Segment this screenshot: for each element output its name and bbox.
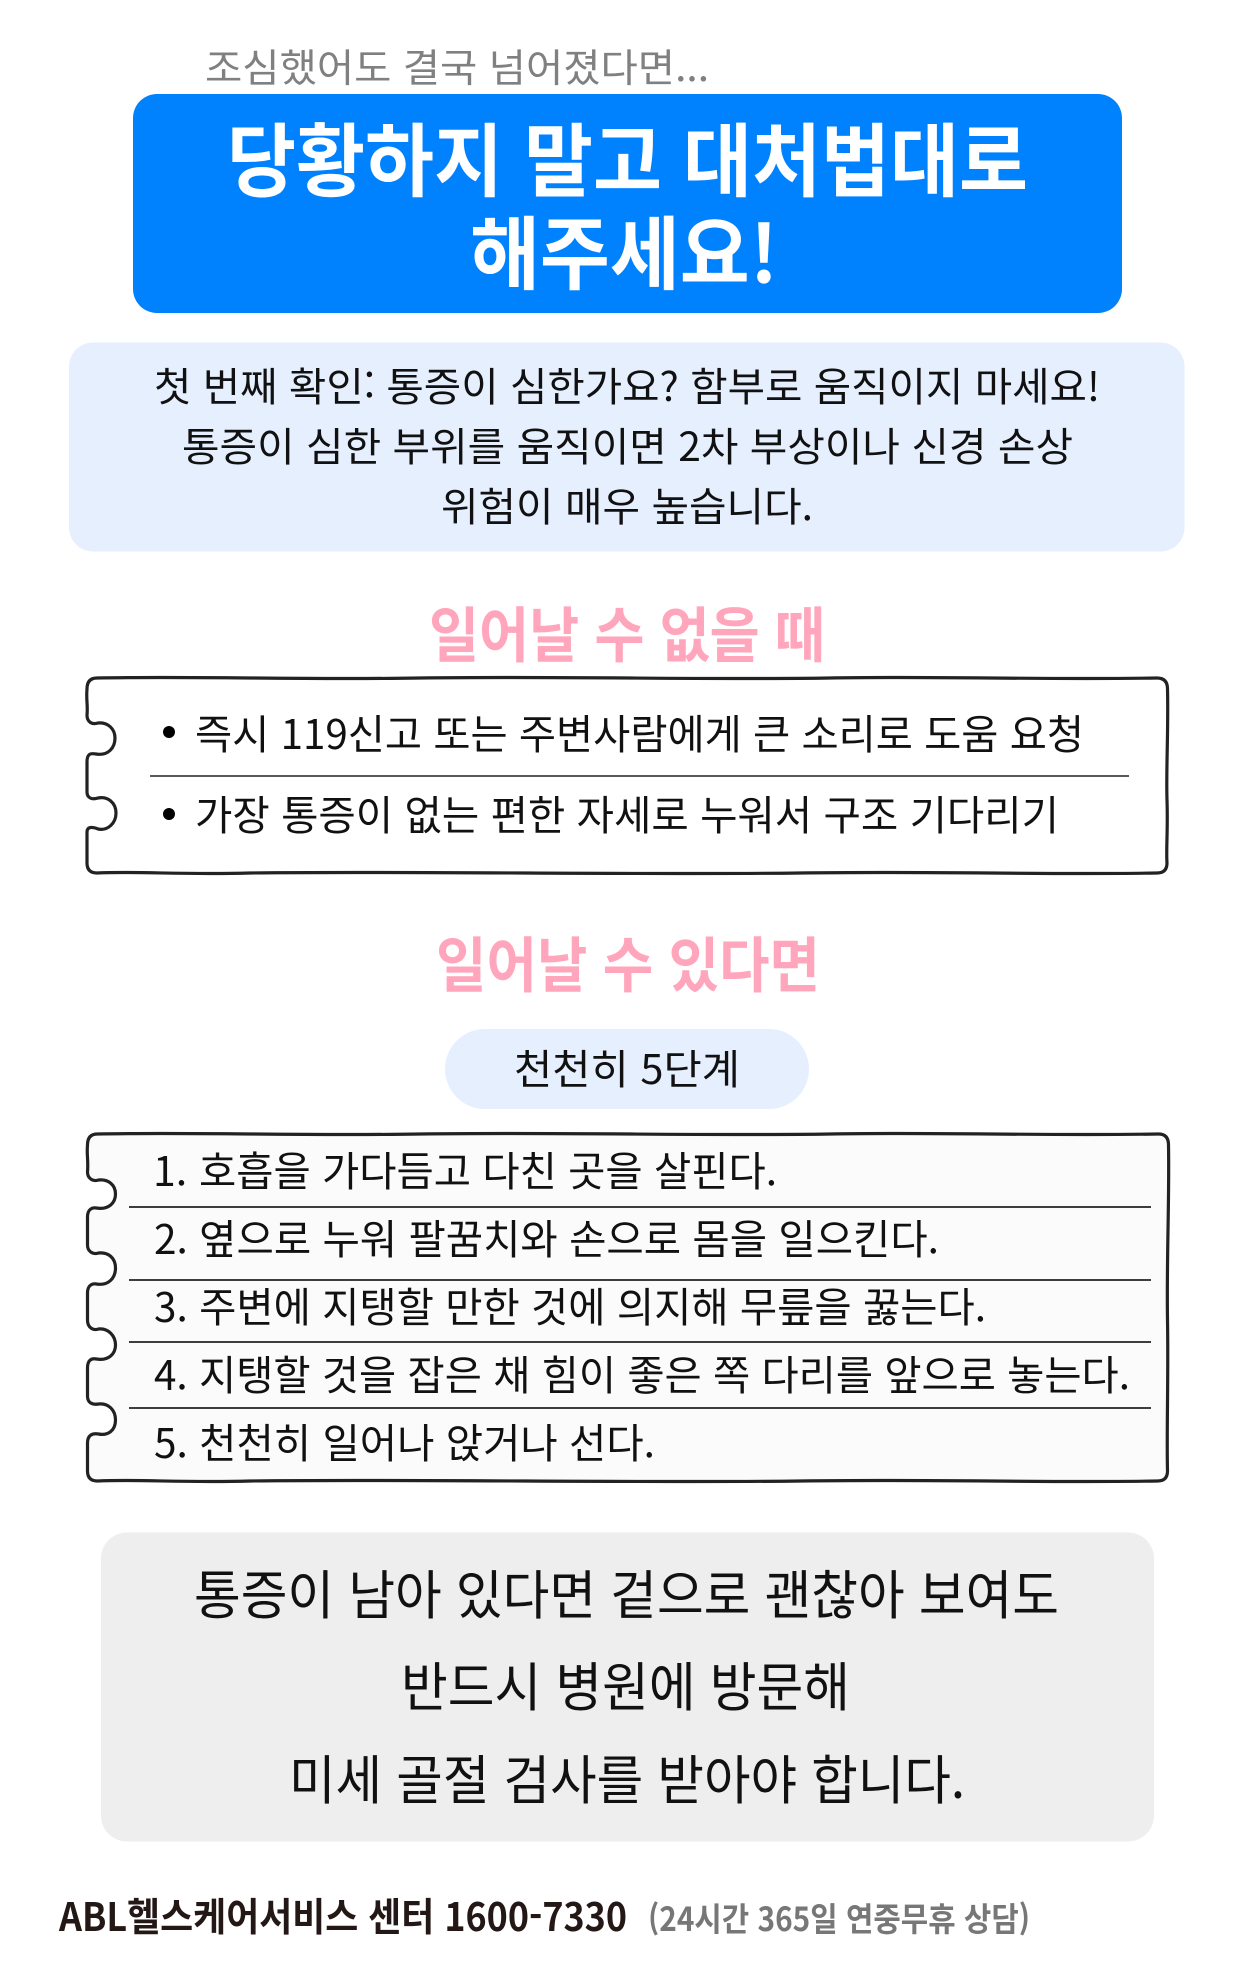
step 5: 5. 천천히 일어나 앉거나 선다. xyxy=(154,1410,655,1470)
panel: hospital notice: 통증이 남아 있다면 겉으로 괜찮아 보여도 xyxy=(194,1554,1059,1630)
panel: steps list xyxy=(87,1133,1169,1482)
ticket frame xyxy=(87,677,1168,874)
panel: cannot stand list xyxy=(87,677,1168,874)
pill: five steps xyxy=(445,1029,809,1109)
ticket frame xyxy=(87,1133,1169,1482)
title banner: 당황하지 말고 대처법대로 xyxy=(227,98,1028,214)
subtitle: 조심했어도 결국 넘어졌다면... xyxy=(205,38,709,94)
panel: first check xyxy=(69,342,1184,552)
footer: contact xyxy=(58,1887,1030,1943)
footer: contact: ABL헬스케어서비스 센터 1600-7330 xyxy=(58,1887,627,1943)
title banner: 해주세요! xyxy=(470,191,778,307)
heading: can stand: 일어날 수 있다면 xyxy=(436,918,820,1005)
step 1: 1. xyxy=(153,1138,187,1198)
title banner xyxy=(133,94,1122,313)
pill: five steps: 천천히 5단계 xyxy=(514,1036,740,1096)
step 2: 2. 옆으로 누워 팔꿈치와 손으로 몸을 일으킨다. xyxy=(154,1206,939,1266)
panel: first check: 통증이 심한 부위를 움직이면 2차 부상이나 신경 손상 xyxy=(182,415,1073,473)
footer: contact: (24시간 365일 연중무휴 상담) xyxy=(648,1893,1030,1941)
panel: cannot stand list: 즉시 119신고 또는 주변사람에게 큰 소리로 도움 요청 xyxy=(195,701,1084,761)
panel: hospital notice: 미세 골절 검사를 받아야 합니다. xyxy=(289,1739,965,1815)
panel: hospital notice: 반드시 병원에 방문해 xyxy=(401,1646,850,1722)
panel: first check: 첫 번째 확인: 통증이 심한가요? 함부로 움직이지 마세요! xyxy=(154,355,1100,413)
step 4: 4. 지탱할 것을 잡은 채 힘이 좋은 쪽 다리를 앞으로 놓는다. xyxy=(154,1342,1130,1402)
bullet 1 xyxy=(163,726,175,738)
bullet 2 xyxy=(163,808,175,820)
panel: cannot stand list: 가장 통증이 없는 편한 자세로 누워서 구조 기다리기 xyxy=(195,782,1059,842)
heading: cannot stand: 일어날 수 없을 때 xyxy=(429,588,825,675)
step 1: 호흡을 가다듬고 다친 곳을 살핀다. xyxy=(199,1138,777,1198)
step 3: 3. 주변에 지탱할 만한 것에 의지해 무릎을 꿇는다. xyxy=(154,1274,986,1334)
panel: first check: 위험이 매우 높습니다. xyxy=(441,475,813,533)
panel: hospital notice xyxy=(101,1532,1154,1842)
